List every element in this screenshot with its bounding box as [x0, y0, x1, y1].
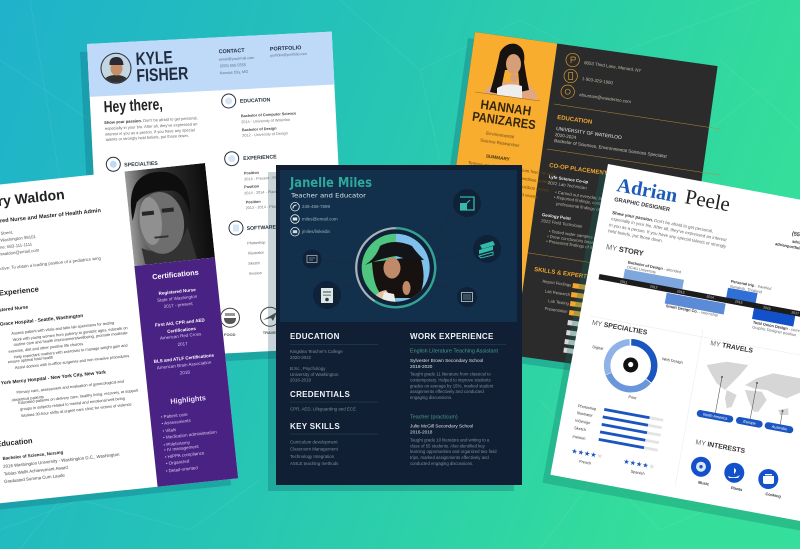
skill bars: InDesign: [575, 418, 591, 425]
contact and objective: [0, 230, 102, 272]
icon: books: [473, 235, 501, 263]
education: Tobias Wells Achievement Award: [4, 465, 69, 476]
timeline: 2012: [650, 284, 658, 290]
intro text: talents or strongly held beliefs, put those down.: [105, 133, 189, 142]
contact text: 1-903-329-1900: [582, 76, 614, 85]
contact list: 245-456-7899: [302, 204, 331, 209]
section: software: SOFTWARE: [246, 224, 277, 232]
contact text: afountain@wasdertoo.com: [579, 92, 632, 104]
intro text: Show your passion. Don't be afraid to get personal,: [104, 115, 198, 125]
right column: work experience: Taught grade 11 literature from classical to: [410, 372, 491, 376]
subtitle and summary: ut tortor pretium viverra suspendisse potenti: [466, 168, 551, 185]
timeline: Bachelor of Design - attended: [628, 260, 682, 274]
section: education: Bachelor of Design: [242, 127, 277, 132]
certifications: BLS and ATLF Certifications: [153, 353, 215, 364]
name: Hannah Panizares: HANNAH: [480, 97, 532, 119]
right column: work experience: Sylvester Brown Secondary School: [410, 358, 483, 363]
donut chart: Digital: [592, 344, 604, 351]
intro text: interest in you as a person. If you have any special: [105, 127, 195, 137]
skills and expertise bars: SKILLS & EXPERTISE: [534, 267, 597, 282]
co-op placements: • Tested water samples on site: [549, 229, 607, 242]
timeline: Smart Design Co. - internship: [666, 303, 718, 318]
heading: my interests: MY INTERESTS: [695, 439, 746, 455]
section: experience: 2014 - Present - Place: [244, 176, 282, 181]
panel: Adrian Peele resume: [542, 164, 800, 537]
work experience: ensure optimal fetal health: [7, 355, 53, 364]
contact icons: [561, 53, 579, 98]
work experience: Assess patient with vitals and take lab specimens for testing: [11, 320, 114, 336]
right column: work experience: Taught grade 10 literature and writing to a: [410, 438, 490, 442]
subtitle and summary: Environmental: [486, 131, 514, 139]
section: education: Bachelor of Computer Science: [241, 112, 296, 118]
name: Hannah Panizares: [471, 97, 537, 132]
education: [0, 436, 120, 484]
language ratings: ★★★★★: [571, 447, 604, 461]
education: Graduated Summa Cum Laude: [4, 473, 66, 484]
intro text: in you as a person. If you have any special talents or strongly: [609, 222, 727, 249]
language ratings: French: [579, 459, 592, 466]
work experience: obstetrical patients: [11, 394, 44, 402]
timeline: OCAD University: [627, 264, 656, 275]
co-op placements: • Reported findings, completed: [554, 195, 613, 208]
right column: work experience: [410, 332, 506, 466]
contact text: 8053 Third Lane, Menard, NY: [584, 60, 642, 73]
section: software: [229, 221, 277, 276]
highlights: • Medication administration: [163, 429, 217, 440]
icon: certificate: [313, 281, 341, 309]
subtitle and summary: nullam ac tortor vitae purus faucibus ornare: [465, 176, 550, 193]
job title: Teacher and Educator: [290, 192, 366, 200]
co-op placements: professional findings of data: [556, 201, 610, 214]
name: Kyle Fisher: FISHER: [136, 63, 189, 86]
sidebar: purple: [134, 257, 238, 487]
icon: music: [691, 457, 711, 487]
contact list: [291, 202, 338, 236]
highlights: • Detail-oriented: [166, 465, 199, 473]
certifications: First Aid, CPR and AED: [155, 317, 206, 328]
skills and expertise bars: Lab Testing: [548, 298, 570, 306]
intro text: [608, 210, 728, 249]
name: Adrian Peele: [614, 174, 732, 216]
intro text: especially in your bio. After all, they've expressed an: [105, 121, 198, 131]
right column: work experience: conducted engaging discussions.: [410, 461, 473, 466]
timeline: 2015: [735, 299, 743, 305]
world map: North America: [703, 412, 729, 421]
skill bars: [572, 403, 663, 452]
donut chart: [592, 332, 683, 401]
certifications: 2017: [177, 341, 188, 347]
timeline: 2011: [620, 279, 628, 285]
donut chart: Print: [628, 394, 638, 401]
panel: Hannah Panizares resume: [450, 32, 720, 370]
education: [554, 115, 668, 159]
highlights: • Assessments: [161, 418, 192, 426]
portfolio column: PORTFOLIO: [270, 45, 302, 53]
contact column: [218, 48, 255, 75]
co-op placements: • Presented findings of it all: [546, 239, 598, 251]
certifications: State of Washington: [157, 294, 198, 303]
left column: key skills: [290, 422, 378, 466]
icon: chat: [302, 250, 322, 268]
subtitle and summary: Tempus nec feugiat nisl pretium fusce id velit: [468, 160, 556, 177]
highlights: [161, 393, 217, 473]
right column: work experience: Teacher (practicum): [410, 414, 458, 420]
right column: work experience: contemporary. Helped to improve students: [410, 378, 491, 382]
work experience: groups in subjects related to mental and emotional well being: [20, 396, 125, 412]
name heading: [0, 186, 102, 227]
intro text: Show your passion. Don't be afraid to get personal,: [612, 210, 714, 234]
skills and expertise bars: Report Findings: [542, 279, 572, 287]
timeline: 2016: [763, 305, 771, 311]
left column: credentials: CPR, AED, Lifeguarding and ECE: [290, 406, 356, 412]
section: software: Photoshop: [247, 241, 265, 245]
right column: work experience: class of 55 students. Also identified key: [410, 444, 486, 448]
contact column: email@yourmail.com: [219, 56, 255, 62]
photo underline: [475, 92, 540, 101]
skill bars: Photoshop: [578, 403, 597, 411]
left column: key skills: ASILE teaching methods: [290, 461, 339, 466]
section: experience: [225, 152, 282, 210]
certifications: [152, 268, 215, 376]
section: education: [222, 94, 296, 138]
skill bars: Illustrator: [577, 410, 594, 418]
left column: education: 2020-2022: [290, 355, 312, 360]
contact list: miles@email.com: [302, 216, 338, 222]
timeline: 2017: [791, 310, 799, 316]
right column: work experience: English Literature Teaching Assistant: [410, 348, 499, 354]
left column: credentials: CREDENTIALS: [290, 390, 351, 399]
contact list: jmiles/linkedin: [301, 229, 331, 234]
panel: Janelle Miles resume: [268, 165, 522, 491]
world map: Australia: [771, 424, 788, 432]
subtitle and summary: [464, 131, 556, 199]
work experience: Educated patients on delivery care, healthy living, recovery, et support: [18, 387, 139, 405]
education: 2020-2024: [555, 132, 577, 140]
right column: work experience: engaging discussions.: [410, 395, 452, 400]
heading: my travels: MY TRAVELS: [710, 340, 754, 355]
work experience: Worked 30-hour shifts at urgent care clinic for victims of violence: [21, 402, 132, 418]
section: experience: 2014 - 2014 - Place: [244, 190, 277, 195]
highlights: Highlights: [170, 393, 206, 406]
icon: cooking: Cooking: [765, 491, 782, 499]
heading: Hey there: Hey there,: [103, 96, 163, 116]
right column: work experience: 2016-2018: [410, 430, 433, 434]
highlights: • Patient care: [161, 412, 188, 419]
work experience: Help expectant mothers with exercises to manage weight gain and: [14, 343, 128, 359]
highlights: • Vitals: [162, 427, 177, 433]
certifications: 2017 - present: [163, 301, 194, 309]
co-op placements: 2022 Field Technician: [541, 218, 583, 229]
education: Bachelor of Sciences, Environmental Sciences Specialist: [554, 138, 668, 159]
icon: travel: TRAVEL: [263, 330, 279, 335]
right column: work experience: trips, marked assignments effectively and: [410, 455, 489, 460]
highlights: • Organized: [166, 459, 190, 466]
contact column: Kansas City, MO: [220, 70, 248, 75]
section: specialties: [106, 157, 159, 171]
co-op placements: • Drew conclusions based on data: [547, 234, 612, 248]
education: Bachelor of Science, Nursing: [2, 450, 64, 461]
skills and expertise bars: Presentation: [544, 306, 569, 314]
timeline: 2014: [706, 294, 714, 300]
language ratings: Spanish: [630, 469, 645, 476]
donut chart: Web Design: [662, 356, 683, 365]
icon: cooking: [758, 469, 782, 499]
subtitle and summary: suspendisse sed nisi lacus sed viverra: [464, 184, 539, 199]
highlights: • HIPPA compliance: [165, 450, 205, 459]
avatar: Kyle: [100, 53, 132, 85]
contact column: (555) 555-5555: [220, 63, 246, 68]
highlights: • IV management: [164, 444, 200, 452]
certifications: Certifications: [152, 268, 199, 281]
icon: plants: Plants: [731, 485, 743, 492]
subtitle and summary: Science Researcher: [480, 138, 520, 148]
co-op placements: CO-OP PLACEMENTS: [549, 163, 612, 178]
education: EDUCATION: [557, 115, 592, 126]
icon: plants: [724, 463, 744, 492]
skill bars: Sketch: [574, 425, 586, 432]
co-op placements: • Carried out everyday lab work: [555, 190, 616, 203]
skills and expertise bars: Lab Research: [545, 288, 571, 297]
work experience: exercise, diet and other positive life choices: [8, 341, 83, 354]
contact text: [579, 60, 642, 104]
contact column: CONTACT: [218, 48, 245, 55]
left column: education: University of Washington: [290, 372, 339, 377]
left column: education: B.Sc., Psychology: [290, 366, 326, 371]
section: experience: Position: [244, 184, 260, 189]
intro text: especially in your bio. After all, they've expressed an interest: [611, 216, 728, 242]
education: UNIVERSITY OF WATERLOO: [556, 126, 622, 141]
work experience: routine care and health improvement/wellbeing, promote moderate: [13, 330, 128, 347]
language ratings: ★★★★★: [623, 458, 656, 471]
left column: credentials: [290, 390, 378, 412]
co-op placements: 2022 Lab Technician: [548, 180, 588, 191]
certifications: American Brain Association: [157, 360, 212, 370]
world map: [696, 362, 800, 434]
left column: key skills: KEY SKILLS: [290, 422, 340, 431]
left column: education: [290, 332, 378, 382]
work experience: Assist doctors with in-office surgeries and non-invasive procedures: [15, 353, 129, 370]
name: Kyle Fisher: [135, 47, 189, 86]
skills and expertise bars: [534, 267, 611, 358]
section: education: EDUCATION: [240, 97, 271, 105]
right column: work experience: assignments effectively and conducted: [410, 389, 484, 394]
timeline: [598, 260, 800, 337]
co-op placements: Geology Point: [542, 212, 572, 221]
panel: Harry Waldon resume: [0, 163, 238, 517]
heading: my story: MY STORY: [605, 242, 644, 258]
timeline: Graphic Designer position: [752, 324, 797, 337]
work experience: Primary care, assessment and evaluation of gynecological and: [16, 379, 124, 395]
work experience: [0, 285, 139, 418]
right column: work experience: 2018-2020: [410, 364, 433, 369]
world map: Europe: [743, 419, 756, 426]
timeline: Personal trip - traveled: [731, 279, 772, 291]
name: Hannah Panizares: PANIZARES: [471, 109, 537, 132]
right column: work experience: WORK EXPERIENCE: [410, 332, 494, 341]
certifications: American Red Cross: [160, 331, 202, 341]
co-op placements: [541, 163, 616, 251]
portrait: Janelle: [356, 228, 435, 307]
contact and objective: hwaldon@email.com: [0, 247, 40, 257]
right column: work experience: grades on average by 15%, marked student: [410, 384, 494, 388]
section: software: Invision: [249, 271, 262, 276]
icon: presentation: [453, 189, 481, 217]
panel: Kyle Fisher resume: [80, 32, 348, 368]
co-op placements: Lyfe Science Co-op: [549, 174, 589, 185]
icon: music: Music: [698, 480, 710, 487]
section: experience: EXPERIENCE: [243, 154, 277, 162]
section: software: Illustrator: [248, 251, 265, 255]
icon: food: FOOD: [224, 332, 236, 337]
language ratings: [571, 447, 656, 476]
left column: key skills: Technology Integration: [290, 454, 335, 459]
left column: key skills: Classroom Management: [290, 446, 339, 452]
section: experience: 2012 - 2014 - Place: [246, 205, 279, 210]
name: Adrian Peele: GRAPHIC DESIGNER: [614, 197, 670, 213]
subtitle and summary: SUMMARY: [486, 154, 511, 162]
intro text: [104, 115, 198, 142]
icon: document list: [457, 287, 477, 307]
intro text: held beliefs, put those down.: [608, 228, 663, 243]
right column: work experience: learning opportunities and organized two field: [410, 449, 497, 454]
portfolio column: portfolio@portfolio.com: [270, 52, 307, 58]
left column: education: Kingslea Teacher's College: [290, 349, 343, 354]
name: Janelle Miles: Janelle Miles: [289, 176, 372, 191]
name: Adrian Peele: Peele: [683, 184, 732, 216]
section: education: 2012 - University of Design: [242, 131, 288, 138]
education: 2016 Washington University - Washington D.C., Washington: [3, 452, 120, 469]
section: experience: Position: [244, 171, 260, 175]
name: Adrian Peele: Adrian: [615, 174, 679, 207]
certifications: Registered Nurse: [158, 287, 196, 296]
portfolio column: [270, 45, 307, 58]
timeline: Bangkok, Thailand: [730, 284, 762, 294]
section: specialties: SPECIALTIES: [124, 161, 159, 168]
name: Kyle Fisher: KYLE: [135, 47, 173, 69]
section: experience: Position: [246, 200, 261, 204]
contact text: [775, 231, 800, 253]
icon: travel: [260, 307, 280, 335]
heading: my specialties: MY SPECIALTIES: [591, 320, 648, 337]
section: education: 2014 - University of Waterloo: [241, 118, 290, 124]
work experience: Work with young women from puberty to geriatric ages, educate on: [12, 325, 128, 342]
section: software: Sketch: [248, 261, 260, 266]
right column: work experience: Julie McGill Secondary School: [410, 424, 473, 428]
left column: education: EDUCATION: [290, 332, 340, 341]
left column: key skills: Curriculum development: [290, 440, 338, 444]
icon: food: [220, 308, 240, 337]
certifications: 2018: [180, 369, 191, 376]
photo: Hannah: [484, 44, 538, 100]
left column: education: 2016-2019: [290, 378, 312, 382]
certifications: Certifications: [167, 326, 197, 334]
photo: man portrait: [124, 163, 215, 266]
timeline: 2013: [677, 289, 685, 295]
skill bars: Invision: [572, 434, 586, 441]
highlights: • Phlebotomy: [163, 440, 191, 447]
